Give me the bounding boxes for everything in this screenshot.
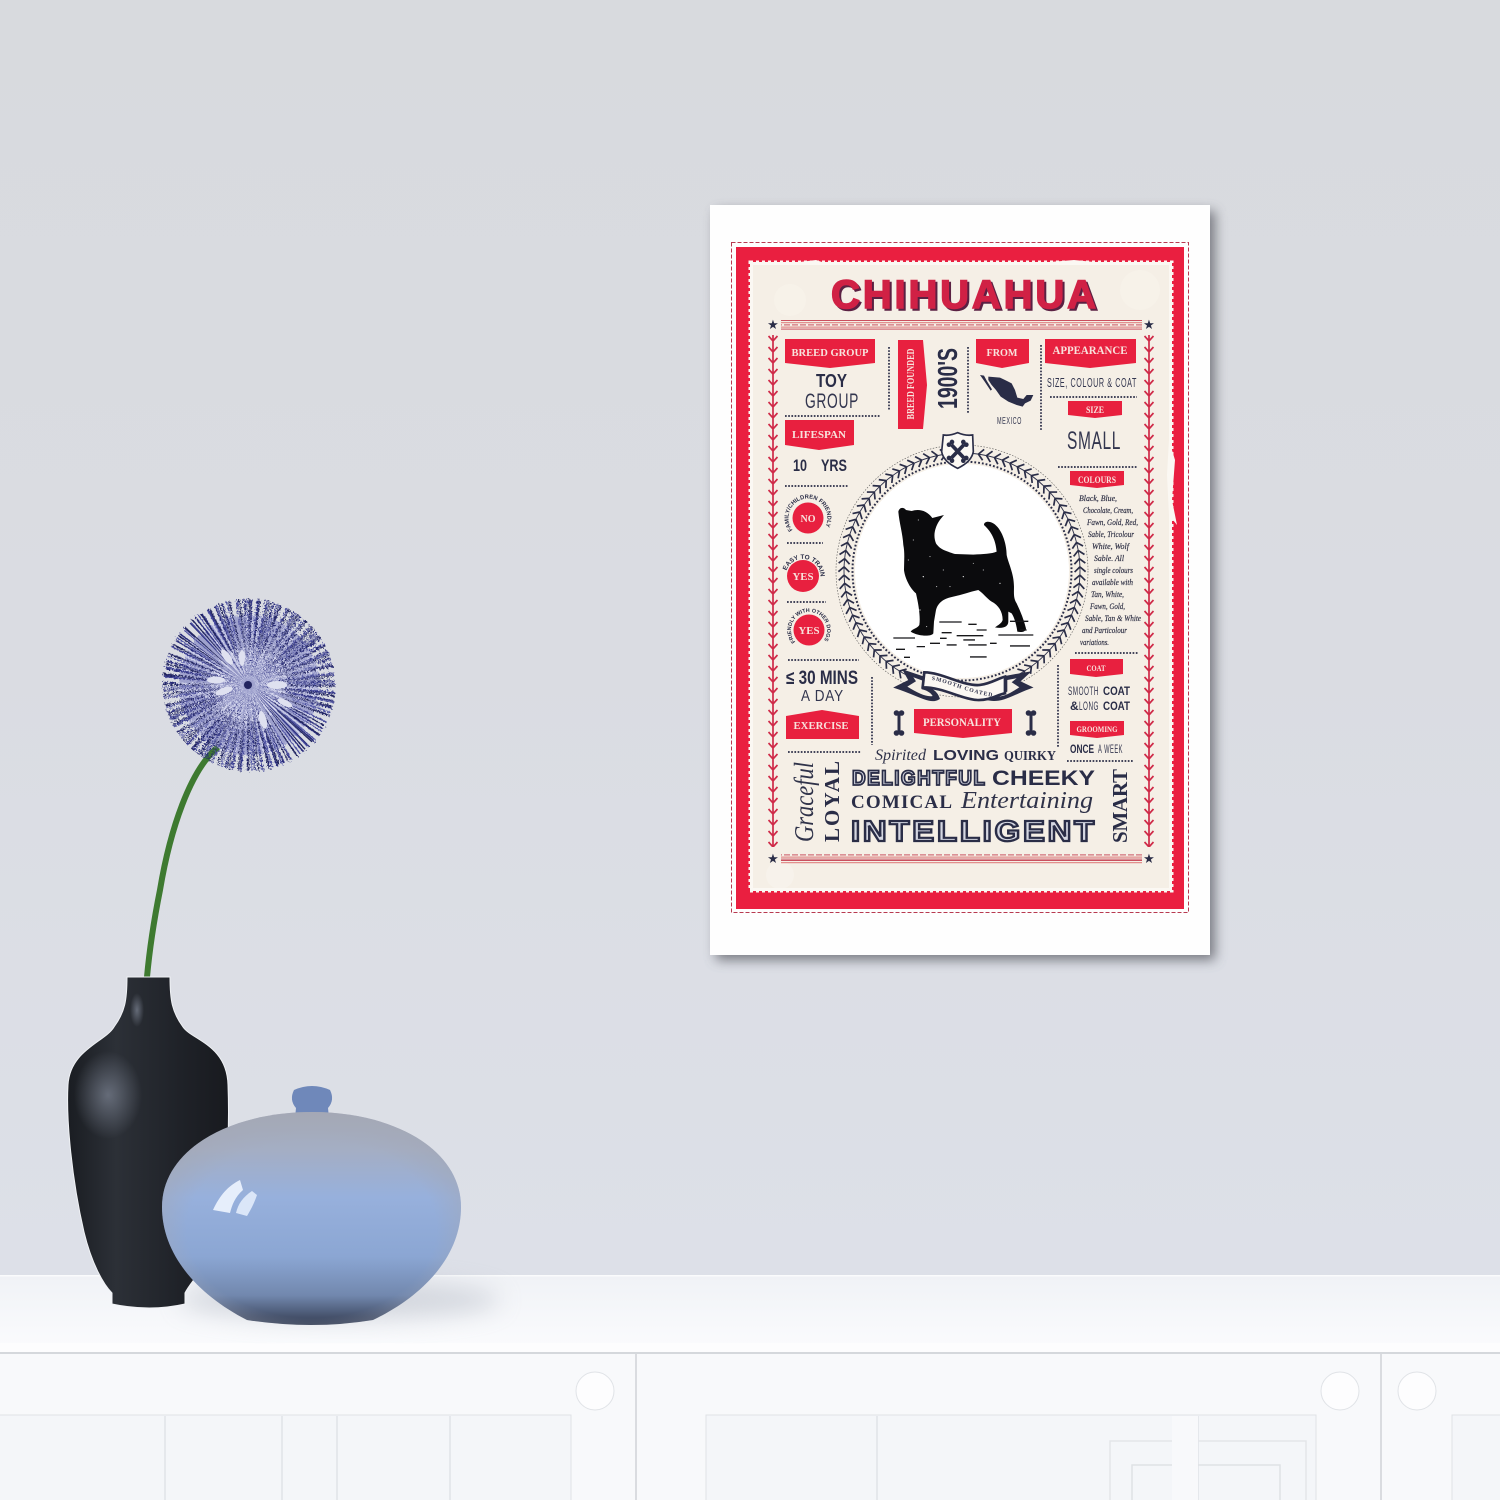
- breed group block: GROUP: [805, 390, 859, 413]
- easy to train badge: [782, 554, 825, 592]
- colours block: White, Wolf: [1092, 542, 1131, 551]
- colours block: Chocolate, Cream,: [1083, 506, 1133, 515]
- personality word cloud: Graceful: [789, 762, 819, 842]
- personality word cloud: QUIRKY: [1004, 749, 1056, 764]
- coat block: COAT: [1086, 663, 1106, 673]
- grooming block: ONCE: [1070, 744, 1094, 756]
- breed founded block: [898, 340, 963, 429]
- personality ribbon with bones: PERSONALITY: [923, 717, 1002, 729]
- decorative bands and stars: ★: [767, 317, 779, 332]
- breed group block: TOY: [816, 371, 847, 391]
- poster drop shadow: [716, 211, 1215, 960]
- exercise block: ≤ 30 MINS: [786, 668, 858, 689]
- size block: SMALL: [1067, 427, 1121, 455]
- grooming block: A WEEK: [1098, 744, 1123, 756]
- ground marks: [893, 621, 1033, 657]
- flower stem: [147, 747, 218, 977]
- colours block: Tan, White,: [1091, 590, 1124, 599]
- allium flower head: [179, 615, 319, 755]
- colours block: Black, Blue,: [1079, 494, 1117, 503]
- laurel wreath: [783, 449, 1141, 693]
- smooth coated banner: SMOOTH COATED: [932, 676, 992, 696]
- black vase: [68, 977, 228, 1308]
- size block: SIZE: [1086, 405, 1104, 415]
- title: CHIHUAHUA: [833, 275, 1098, 319]
- smooth coated banner: [893, 669, 1034, 702]
- family and children friendly badge: FAMILY/CHILDREN FRIENDLY: [784, 494, 832, 532]
- decorative bands and stars: ★: [1143, 317, 1155, 332]
- exercise block: EXERCISE: [794, 720, 848, 732]
- sideboard cabinet: [0, 1275, 1500, 1500]
- lifespan block: LIFESPAN: [792, 430, 846, 441]
- breed group block: BREED GROUP: [792, 347, 869, 359]
- colours block: available with: [1092, 578, 1133, 587]
- breed group block: [785, 339, 875, 413]
- colours block: Sable, Tricolour: [1088, 530, 1135, 539]
- family and children friendly badge: NO: [800, 513, 816, 525]
- dog medallion: [836, 432, 1088, 702]
- colours block: Fawn, Gold, Red,: [1086, 518, 1138, 527]
- grooming block: [1070, 721, 1124, 756]
- from block with map of Mexico: [976, 339, 1033, 427]
- personality word cloud: Entertaining: [960, 788, 1093, 814]
- personality word cloud: [789, 747, 1132, 848]
- colours block: single colours: [1094, 566, 1133, 575]
- appearance block: APPEARANCE: [1052, 345, 1128, 357]
- coat block: &: [1070, 699, 1079, 713]
- colours block: Sable. All: [1094, 554, 1125, 563]
- friendly with other dogs badge: YES: [798, 625, 820, 637]
- friendly with other dogs badge: FRIENDLY WITH OTHER DOGS: [787, 608, 831, 644]
- decorative bands and stars: ★: [1143, 851, 1155, 866]
- title: CHIHUAHUA: [831, 273, 1096, 317]
- size block: [1067, 401, 1122, 455]
- icon: map of Mexico: [980, 375, 1033, 407]
- appearance block: SIZE, COLOUR & COAT: [1047, 376, 1137, 390]
- coat block: [1068, 659, 1131, 713]
- coat block: COAT: [1103, 684, 1131, 698]
- colours block: [1070, 471, 1141, 647]
- colours block: COLOURS: [1078, 475, 1116, 485]
- decorative bands and stars: ★: [767, 851, 779, 866]
- colours block: variations.: [1080, 638, 1109, 647]
- lifespan block: 10: [793, 456, 807, 475]
- personality word cloud: Spirited: [875, 747, 927, 764]
- icon: bone left: [894, 710, 904, 736]
- icon: bone right: [1026, 710, 1036, 736]
- coat block: SMOOTH: [1068, 684, 1099, 698]
- appearance block: [1045, 339, 1137, 390]
- cabinet knobs: [576, 1372, 1436, 1410]
- dog silhouette: [893, 508, 1033, 657]
- personality word cloud: CHEEKY: [992, 767, 1095, 790]
- personality ribbon with bones: [894, 709, 1036, 738]
- personality word cloud: COMICAL: [851, 792, 952, 813]
- easy to train badge: YES: [792, 571, 814, 583]
- breed founded block: 1900'S: [932, 348, 963, 409]
- shield with crossed bones: [942, 433, 973, 468]
- colours block: Fawn, Gold,: [1089, 602, 1125, 611]
- exercise block: A DAY: [801, 688, 844, 705]
- white circle: [855, 464, 1069, 678]
- framed poster: [708, 202, 1224, 968]
- colours block: and Particolour: [1082, 626, 1128, 635]
- breed founded block: BREED FOUNDED: [906, 348, 917, 420]
- grooming block: GROOMING: [1076, 725, 1118, 734]
- from block with map of Mexico: MEXICO: [997, 416, 1022, 427]
- easy to train badge: EASY TO TRAIN: [782, 554, 825, 576]
- personality word cloud: DELIGHTFUL: [852, 767, 985, 790]
- personality word cloud: INTELLIGENT: [851, 816, 1097, 848]
- coat block: COAT: [1103, 699, 1131, 713]
- personality word cloud: LOYAL: [820, 761, 844, 842]
- colours block: Sable, Tan & White: [1085, 614, 1141, 623]
- lifespan block: [785, 420, 854, 475]
- blue vase: [162, 1086, 461, 1325]
- decorative bands and stars: [767, 317, 1155, 866]
- lifespan block: YRS: [821, 456, 847, 475]
- from block with map of Mexico: FROM: [986, 347, 1018, 359]
- coat block: LONG: [1079, 699, 1099, 713]
- dotted dividers: [785, 345, 1138, 761]
- personality word cloud: SMART: [1108, 769, 1132, 843]
- personality word cloud: LOVING: [933, 747, 999, 764]
- exercise block: [786, 668, 859, 739]
- vase shadow on shelf: [180, 1280, 500, 1320]
